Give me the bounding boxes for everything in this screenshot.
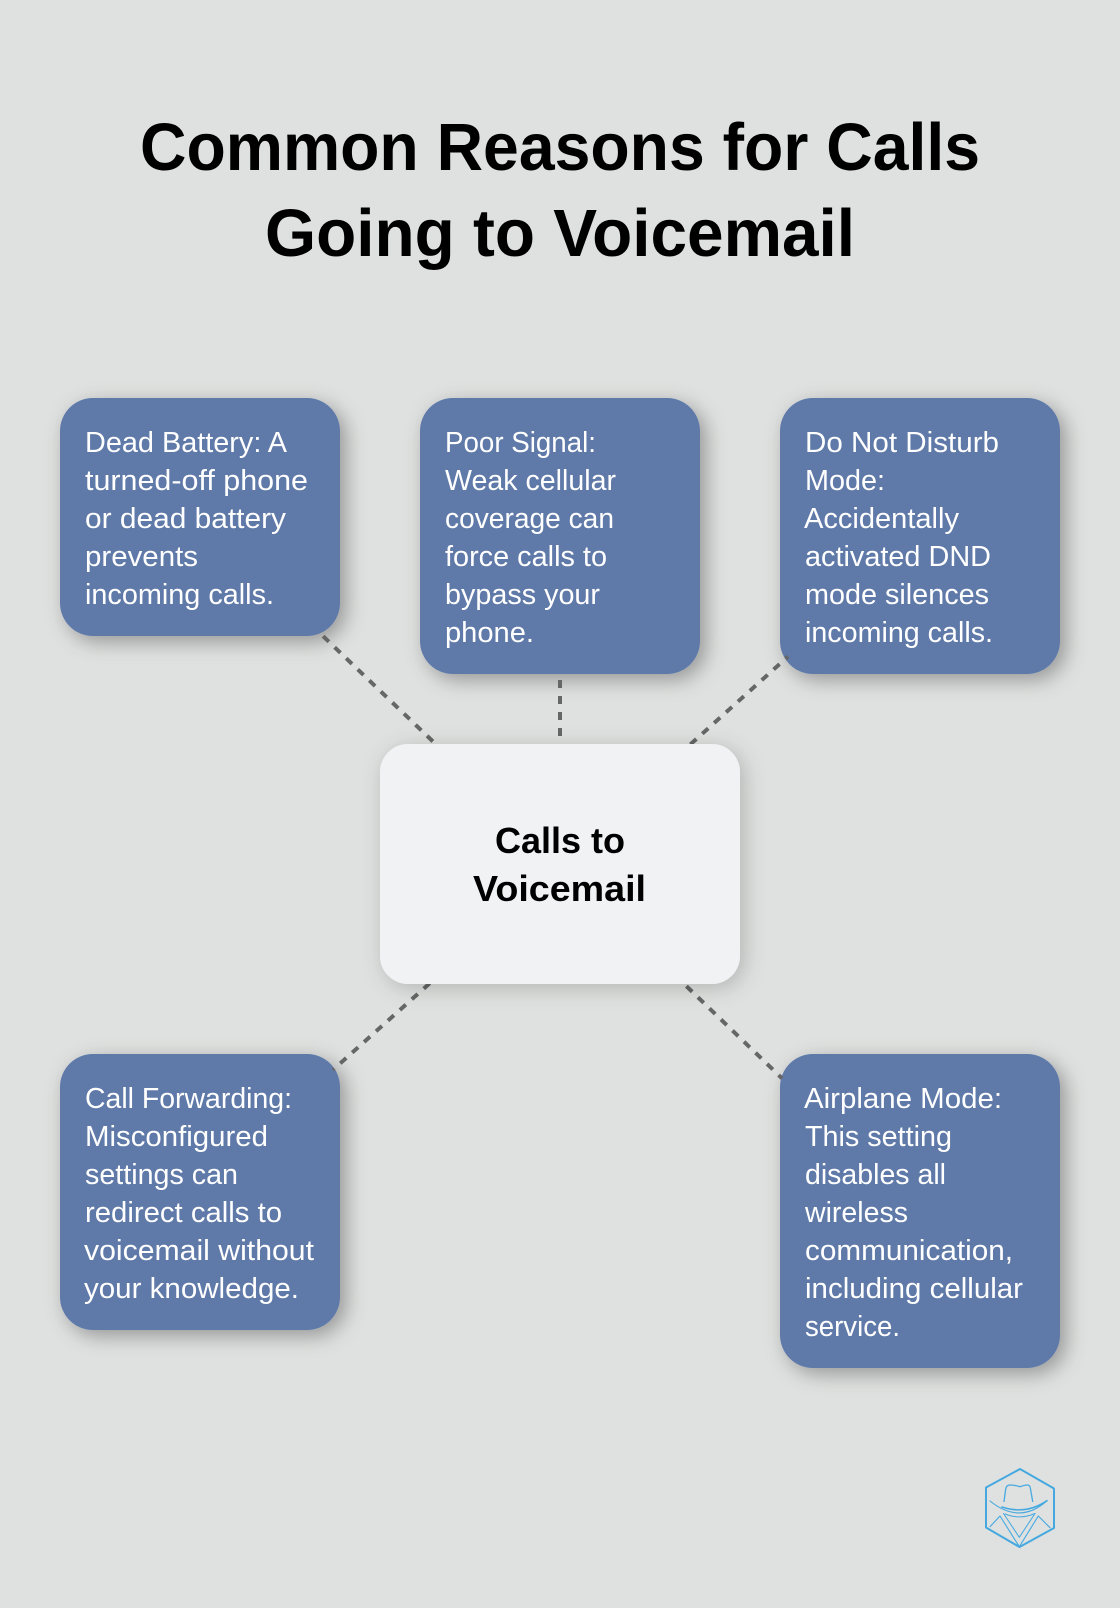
text: dead battery	[85, 427, 308, 611]
connector: poor signal to center	[558, 680, 562, 736]
text: call forwarding: settings can	[85, 1159, 238, 1191]
text: call forwarding: Call Forwarding:	[85, 1083, 292, 1115]
text: do not disturb mode: mode silences	[805, 579, 989, 611]
text: airplane mode: communication,	[805, 1235, 1013, 1267]
text: call forwarding	[84, 1083, 314, 1305]
text: do not disturb mode: Mode:	[805, 465, 885, 497]
icon: logo, hexagon with hat-wearing figure	[986, 1469, 1054, 1547]
text: poor signal: Weak cellular	[445, 465, 616, 497]
text: poor signal: phone.	[445, 617, 534, 649]
title: Going to Voicemail	[265, 196, 855, 271]
center box: calls to voicemail	[380, 744, 740, 984]
text: call forwarding: Misconfigured	[85, 1121, 268, 1153]
text: do not disturb mode: activated DND	[805, 541, 991, 573]
panel: dead battery	[60, 398, 340, 636]
text: poor signal: force calls to	[445, 541, 607, 573]
center label: Calls to	[495, 820, 625, 861]
text: poor signal: coverage can	[445, 503, 614, 535]
text: airplane mode: including cellular	[805, 1273, 1023, 1305]
panel: airplane mode	[780, 1054, 1060, 1368]
text: do not disturb mode: Accidentally	[804, 503, 959, 535]
title: Common Reasons for Calls	[140, 110, 980, 185]
text: call forwarding: redirect calls to	[85, 1197, 282, 1229]
text: airplane mode: service.	[805, 1311, 900, 1343]
text: call forwarding: your knowledge.	[84, 1273, 299, 1305]
text: do not disturb mode	[804, 427, 999, 649]
text: do not disturb mode: Do Not Disturb	[805, 427, 999, 459]
text: airplane mode	[804, 1083, 1023, 1343]
panel: poor signal	[420, 398, 700, 674]
text: dead battery: Dead Battery: A	[85, 427, 288, 459]
text: dead battery: turned-off phone	[85, 465, 308, 497]
panel: call forwarding	[60, 1054, 340, 1330]
text: airplane mode: Airplane Mode:	[804, 1083, 1002, 1115]
text: dead battery: prevents	[85, 541, 198, 573]
text: dead battery: incoming calls.	[85, 579, 274, 611]
text: airplane mode: This setting	[805, 1121, 952, 1153]
panel: do not disturb mode	[780, 398, 1060, 674]
text: do not disturb mode: incoming calls.	[805, 617, 993, 649]
connector: call forwarding to center	[333, 983, 430, 1070]
text: call forwarding: voicemail without	[84, 1235, 314, 1267]
text: airplane mode: disables all	[805, 1159, 946, 1191]
center label: Voicemail	[473, 868, 646, 909]
text: dead battery: or dead battery	[85, 503, 287, 535]
text: poor signal	[445, 427, 616, 649]
connector: dead battery to center	[323, 636, 434, 742]
connector: do not disturb to center	[690, 656, 788, 744]
title	[140, 110, 980, 271]
text: airplane mode: wireless	[804, 1197, 908, 1229]
text: poor signal: bypass your	[445, 579, 600, 611]
center label	[473, 820, 646, 909]
connector: airplane mode to center	[686, 986, 782, 1078]
text: poor signal: Poor Signal:	[445, 427, 596, 459]
